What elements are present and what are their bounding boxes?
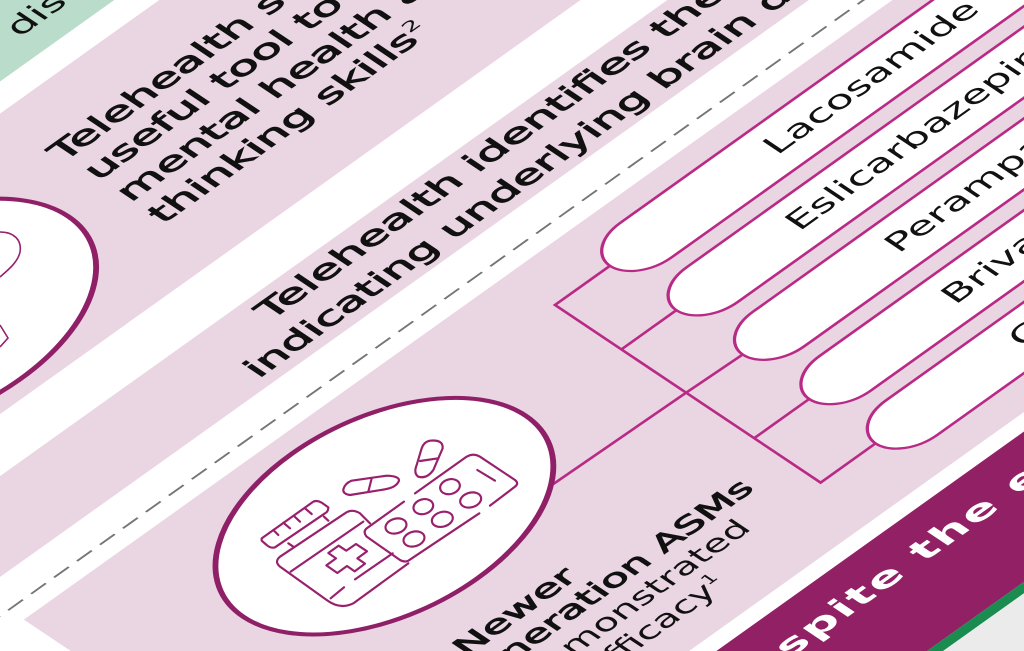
blister pack: [365, 455, 517, 562]
circle icon: telehealth: [0, 154, 161, 480]
text: telehealth useful tool: [39, 0, 553, 232]
capsule horizontal: [343, 476, 399, 495]
text: telehealth useful tool: 2: [397, 16, 427, 36]
bracket connectors: [425, 264, 878, 576]
icon: medicine kit, tape and pills: [262, 440, 517, 606]
text: newer generation ASMs: 1: [697, 570, 723, 588]
text: telehealth useful tool: thinking skills: [140, 25, 427, 229]
measuring tape: [262, 501, 328, 548]
first aid kit: [277, 511, 408, 606]
icon: partial head outline: [0, 232, 20, 347]
capsule vertical: [415, 440, 443, 477]
circle background: medicine icon: [150, 353, 618, 651]
grey footer: [268, 0, 1024, 651]
green rule: [259, 0, 1024, 651]
